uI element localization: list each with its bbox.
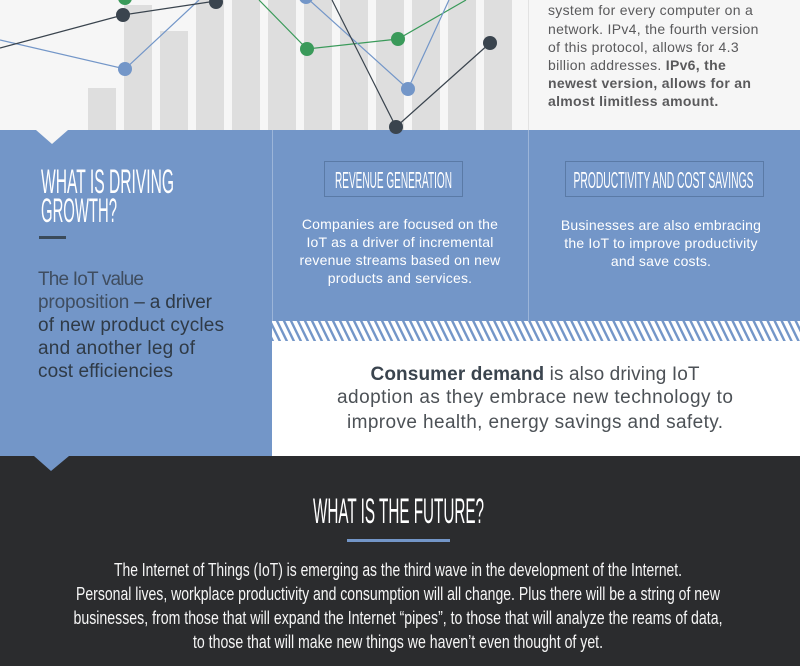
label box: productivity and cost savings bbox=[566, 162, 764, 196]
text block: consumer demand: improve health, energy savings and safety. bbox=[347, 412, 723, 433]
text block: IP addresses: network. IPv4, the fourth version bbox=[548, 21, 759, 37]
icon: section notch top bbox=[36, 130, 68, 144]
line chart: dark series bbox=[0, 0, 497, 127]
panel: future bbox=[0, 456, 800, 666]
text block: IoT value proposition: of new product cycles bbox=[38, 315, 224, 336]
panel: revenue generation: REVENUE GENERATION bbox=[335, 167, 452, 193]
text block: revenue description bbox=[300, 216, 501, 286]
text block: revenue description: revenue streams based on new bbox=[300, 252, 501, 268]
icon: section notch bottom bbox=[34, 456, 69, 471]
line chart: blue series bbox=[0, 0, 449, 96]
heading: what is driving growth bbox=[41, 163, 174, 230]
label box: revenue generation bbox=[324, 162, 462, 196]
text block: IP addresses: newest version, allows for an bbox=[548, 75, 751, 91]
text block: revenue description: products and services. bbox=[328, 270, 472, 286]
dark point on the line chart bbox=[389, 120, 403, 134]
text block: revenue description: IoT as a driver of incremental bbox=[306, 234, 494, 250]
text: WHAT IS THE FUTURE? bbox=[313, 492, 484, 531]
text block: IP addresses: system for every computer on a bbox=[548, 2, 753, 18]
panel: blue band bbox=[0, 130, 800, 321]
text block: IoT value proposition: and another leg of bbox=[38, 338, 196, 359]
text block: IoT value proposition: The IoT value bbox=[38, 269, 144, 290]
line chart: green series bbox=[118, 0, 466, 56]
text block: IP addresses: almost limitless amount. bbox=[548, 93, 719, 109]
text block: IP addresses bbox=[548, 2, 759, 109]
panel: productivity and cost savings bbox=[561, 162, 764, 269]
bar chart bbox=[88, 0, 512, 130]
panel: revenue generation bbox=[300, 162, 501, 286]
divider lines bbox=[272, 130, 528, 321]
text block: productivity description: and save costs. bbox=[611, 253, 711, 269]
text block: productivity description: the IoT to improve productivity bbox=[564, 235, 758, 251]
text block: productivity description: Businesses are also embracing bbox=[561, 217, 761, 233]
text block: IP addresses: of this protocol, allows for 4.3 bbox=[548, 39, 739, 55]
text block: consumer demand: Consumer demand is also driving IoT bbox=[370, 364, 700, 385]
text block: future description: to those that will make new things we haven’t even thought of yet. bbox=[193, 632, 603, 652]
text block: consumer demand bbox=[337, 364, 733, 433]
text block: IoT value proposition bbox=[38, 269, 224, 382]
heading: what is driving growth: GROWTH? bbox=[41, 192, 117, 230]
hatched band bbox=[272, 321, 800, 341]
text block: revenue description: Companies are focused on the bbox=[302, 216, 498, 232]
text block: productivity description bbox=[561, 217, 761, 269]
panel: consumer demand bbox=[272, 341, 800, 456]
text block: IoT value proposition: proposition – a driver bbox=[38, 292, 213, 313]
text block: IP addresses: billion addresses. IPv6, the bbox=[548, 57, 726, 73]
text: WHAT IS DRIVING bbox=[41, 163, 174, 201]
panel: left blue column bbox=[0, 130, 272, 456]
text block: consumer demand: adoption as they embrace new technology to bbox=[337, 387, 733, 408]
text block: future description bbox=[74, 560, 722, 652]
heading rule bbox=[347, 539, 450, 542]
heading rule bbox=[39, 236, 66, 239]
panel: chart background bbox=[0, 0, 800, 130]
text block: IoT value proposition: cost efficiencies bbox=[38, 361, 173, 382]
